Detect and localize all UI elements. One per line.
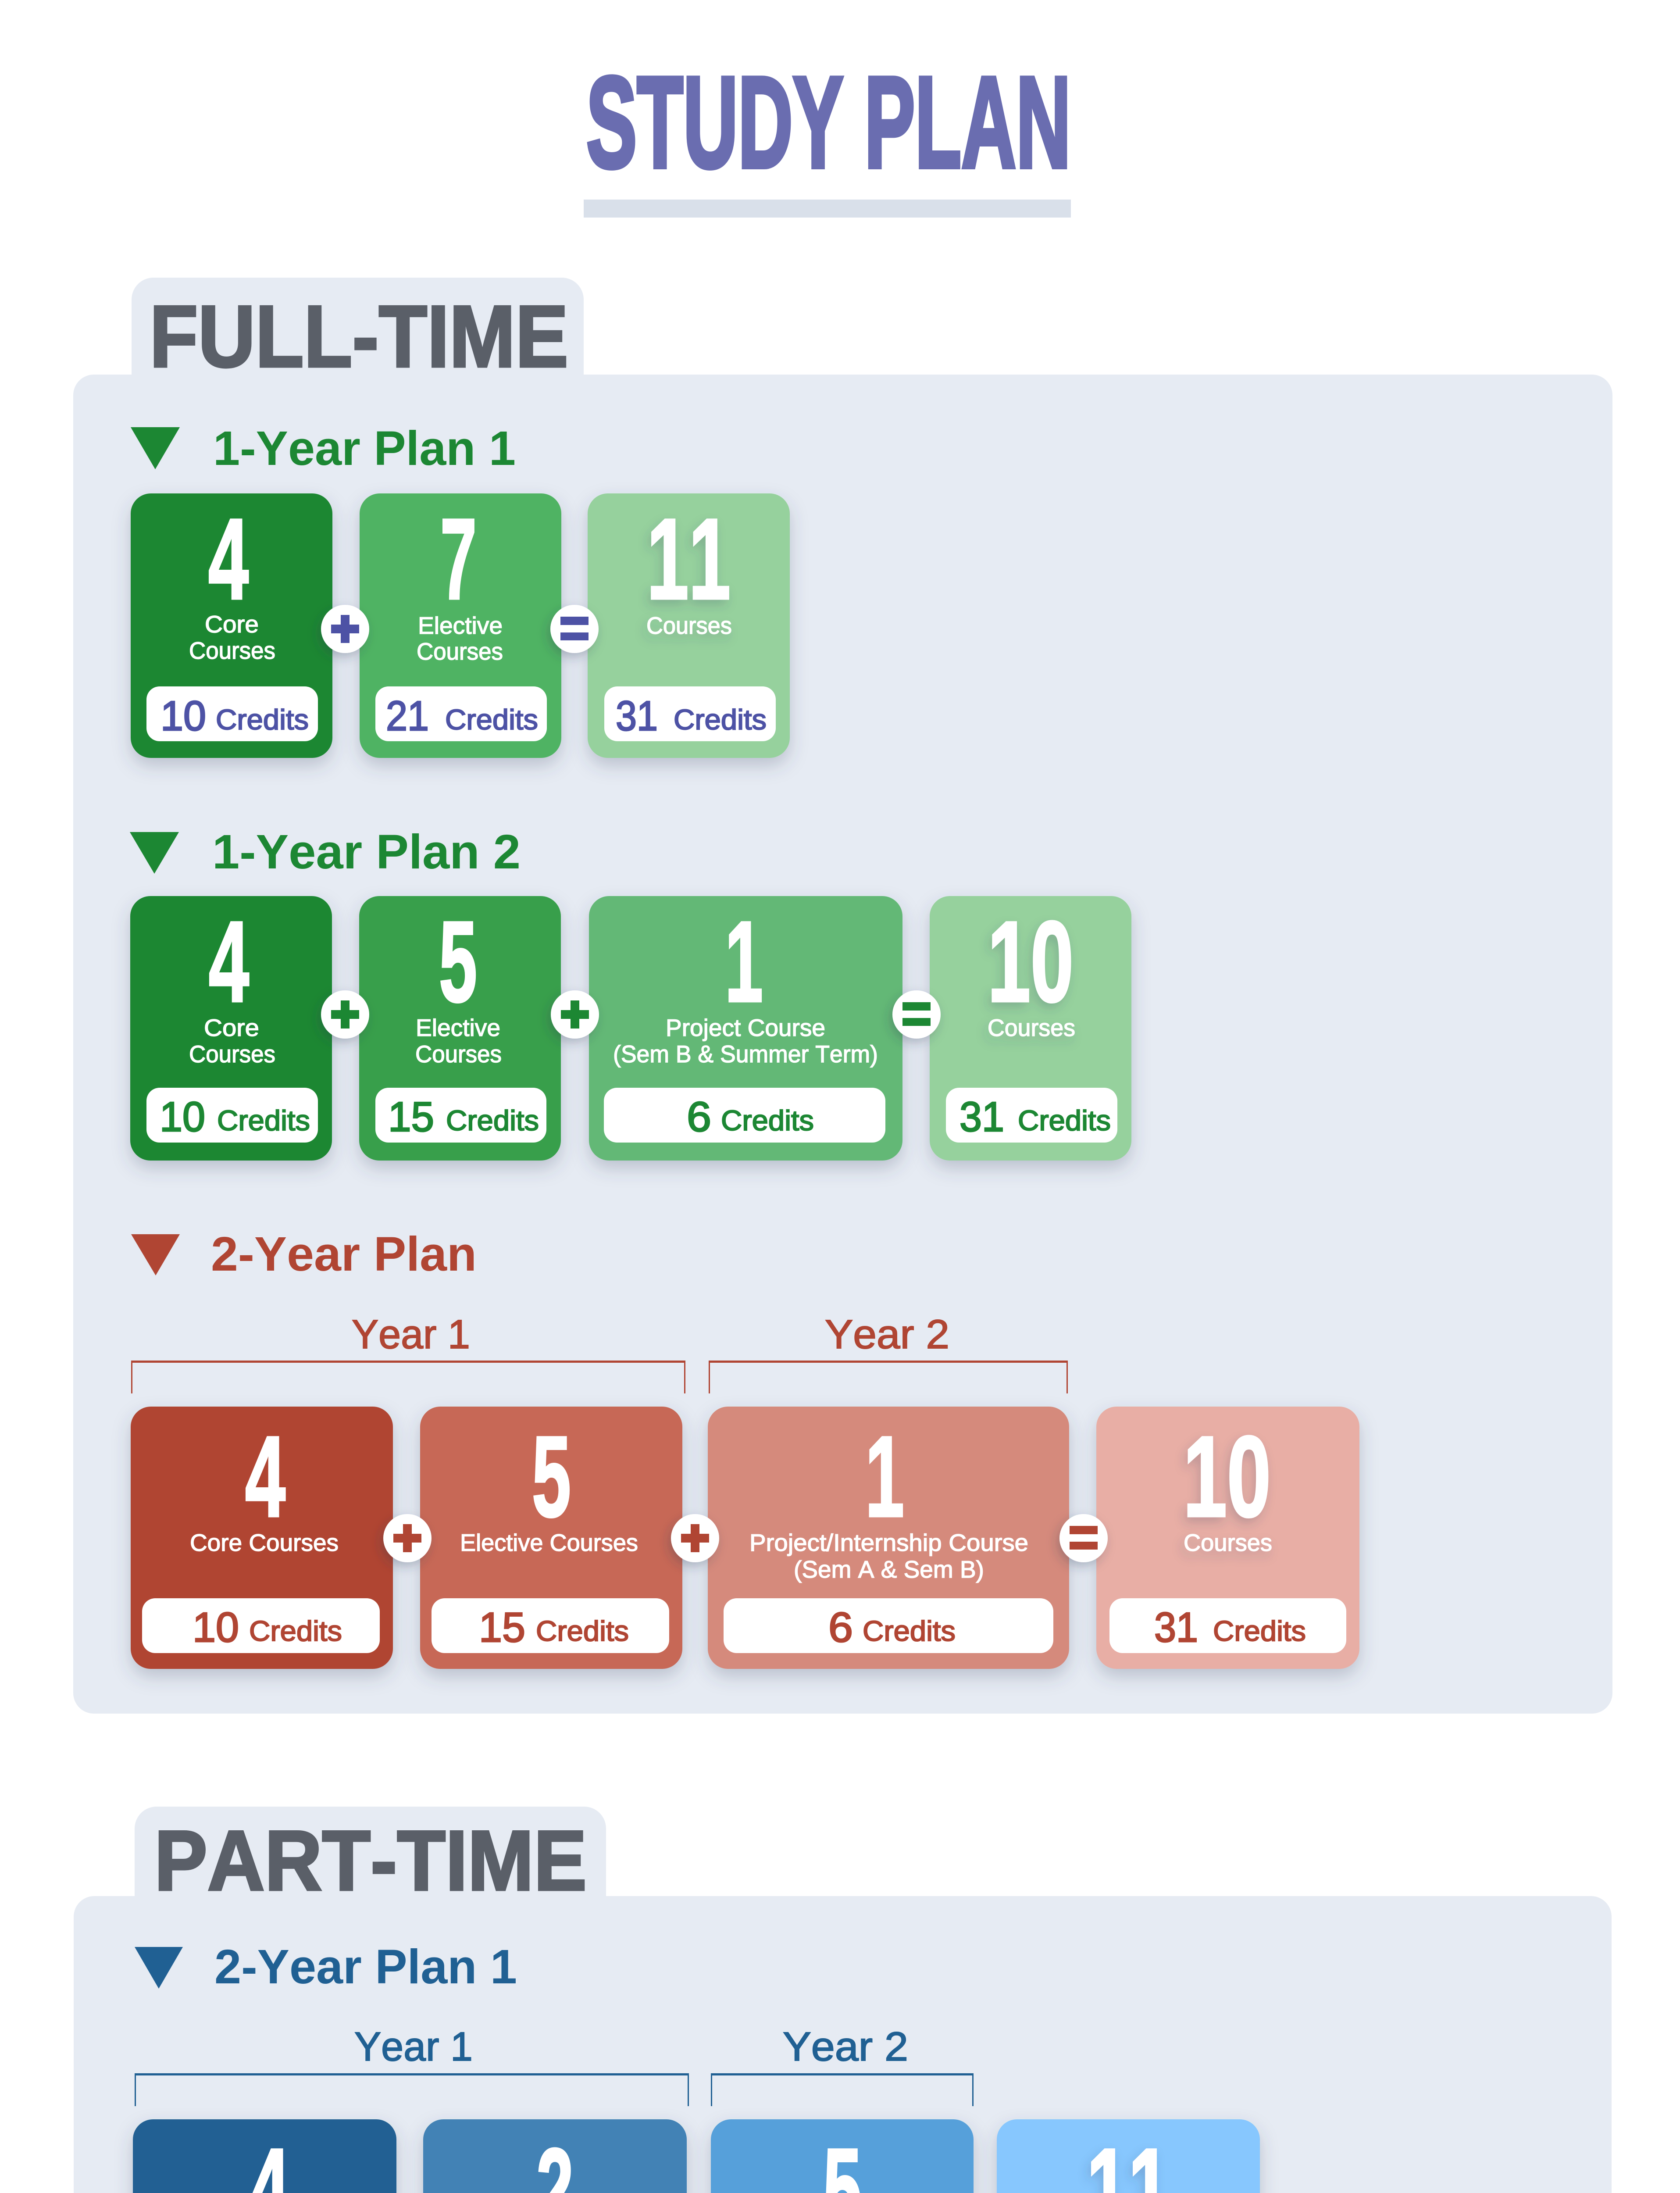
card: 4 core courses: Courses — [189, 1040, 275, 1068]
card: 1 project course: Project Course — [666, 1014, 825, 1041]
card: 4 core courses: 10 — [161, 693, 206, 739]
card: 7 elective courses: Credits — [445, 704, 538, 736]
card: 5 elective courses — [359, 896, 561, 1161]
card: 7 elective courses: Elective — [418, 612, 503, 639]
heading: part-time: PART-TIME — [154, 1813, 587, 1908]
card: 4 core courses: 4 — [245, 1412, 286, 1541]
bracket: year 2 — [709, 1361, 1068, 1393]
card: 5 elective courses: 5 — [532, 1412, 571, 1541]
card: 5 elective courses: Elective Courses — [460, 1529, 638, 1556]
card: 1 project/internship course: Project/Internship Course — [749, 1529, 1028, 1556]
card: 10 courses total: 10 — [1183, 1412, 1271, 1541]
card: 5 elective courses — [420, 1407, 682, 1669]
card: 7 elective courses: Courses — [417, 638, 503, 665]
operator: equals — [1059, 1514, 1108, 1562]
card: 1 project/internship course: 1 — [865, 1412, 904, 1541]
card: 4 core courses: 10 — [160, 1093, 205, 1140]
card: 4 core courses — [133, 2119, 396, 2193]
plan heading: 2-Year Plan 1: 2-Year Plan 1 — [214, 1940, 517, 1994]
card: 10 courses total: 10 — [988, 897, 1074, 1026]
plan heading: 1-Year Plan 2: 1-Year Plan 2 — [212, 825, 521, 879]
panel: part-time — [74, 1807, 1612, 2193]
operator: plus — [383, 1514, 432, 1562]
card: 4 core courses: 4 — [209, 897, 250, 1026]
card: 11 courses total: Credits — [674, 704, 767, 736]
card: 1 project/internship course — [708, 1407, 1069, 1669]
card: 4 core courses — [131, 1407, 393, 1669]
card: 4 core courses — [131, 493, 332, 758]
card: 5 elective courses: Courses — [415, 1040, 502, 1068]
card: 5 elective courses: 15 — [388, 1093, 434, 1140]
bracket: year 1 — [135, 2073, 689, 2106]
card: 10 courses total: Credits — [1213, 1615, 1306, 1647]
heading: full-time: FULL-TIME — [150, 288, 568, 386]
year label: Year 1: Year 1 — [352, 1311, 470, 1357]
card: 4 core courses: 10 — [193, 1604, 239, 1651]
card: 10 courses total: 31 — [959, 1093, 1004, 1140]
card: 2 elective courses — [423, 2119, 687, 2193]
card: 7 elective courses: 21 — [386, 693, 429, 739]
panel background — [73, 375, 1612, 1714]
card: 11 courses total: 31 — [616, 693, 658, 739]
year label: Year 2: Year 2 — [783, 2024, 908, 2069]
tab: part-time — [135, 1807, 606, 1917]
year label: Year 2: Year 2 — [825, 1311, 949, 1357]
year label: Year 1: Year 1 — [354, 2024, 473, 2069]
card: 10 courses total — [930, 896, 1131, 1161]
card: 1 project/internship course: 6 — [828, 1604, 853, 1651]
tab: full-time — [132, 278, 584, 395]
card: 4 core courses: Core — [204, 1014, 259, 1041]
operator: equals — [550, 605, 599, 653]
card: 4 core courses: Core — [205, 611, 259, 638]
operator: equals — [892, 990, 941, 1039]
operator: plus — [321, 990, 369, 1039]
card: 4 core courses: 4 — [208, 495, 249, 623]
card: 10 courses total: 31 — [1154, 1604, 1198, 1651]
card: 11 courses total: Courses — [646, 612, 732, 639]
card: 1 project/internship course: (Sem A & Sem B) — [794, 1556, 984, 1583]
card: 10 courses total — [1096, 1407, 1359, 1669]
card: 5 elective courses — [711, 2119, 974, 2193]
card: 10 courses total: Credits — [1018, 1104, 1111, 1136]
plan heading: 2-Year Plan: 2-Year Plan — [211, 1227, 477, 1281]
card: 11 courses total: 11 — [647, 495, 731, 623]
card: 4 core courses: Courses — [189, 637, 275, 664]
card: 4 core courses — [130, 896, 332, 1161]
panel background — [74, 1896, 1612, 2193]
card: 1 project course: Credits — [721, 1104, 814, 1136]
plan heading: 1-Year Plan 1: 1-Year Plan 1 — [213, 421, 516, 475]
card: 5 elective courses: Credits — [446, 1104, 539, 1136]
card: 7 elective courses — [360, 493, 561, 758]
card: 11 courses total — [588, 493, 790, 758]
card: 5 elective courses: Elective — [416, 1014, 500, 1041]
card: 1 project/internship course: Credits — [863, 1615, 956, 1647]
title: STUDY PLAN — [586, 50, 1071, 195]
card: 7 elective courses: 7 — [440, 495, 477, 623]
card: 1 project course — [589, 896, 902, 1161]
card: 4 core courses: Credits — [217, 1104, 310, 1136]
card: 5 elective courses: Credits — [536, 1615, 629, 1647]
card: 11 courses total — [997, 2119, 1260, 2193]
card: 4 core courses: Credits — [216, 704, 309, 736]
operator: plus — [321, 605, 369, 653]
panel: full-time — [73, 278, 1612, 1714]
card: 1 project course: 1 — [725, 897, 763, 1026]
title underline — [584, 200, 1071, 218]
operator: plus — [671, 1514, 719, 1562]
card: 5 elective courses: 15 — [479, 1604, 525, 1651]
bracket: year 1 — [131, 1361, 685, 1393]
operator: plus — [551, 990, 599, 1039]
card: 4 core courses: Credits — [249, 1615, 342, 1647]
bracket: year 2 — [711, 2073, 974, 2106]
card: 10 courses total: Courses — [988, 1014, 1075, 1041]
card: 1 project course: (Sem B & Summer Term) — [613, 1040, 878, 1068]
card: 4 core courses: Core Courses — [190, 1529, 339, 1556]
card: 5 elective courses: 5 — [439, 897, 477, 1026]
card: 10 courses total: Courses — [1184, 1529, 1272, 1556]
card: 1 project course: 6 — [687, 1093, 711, 1140]
